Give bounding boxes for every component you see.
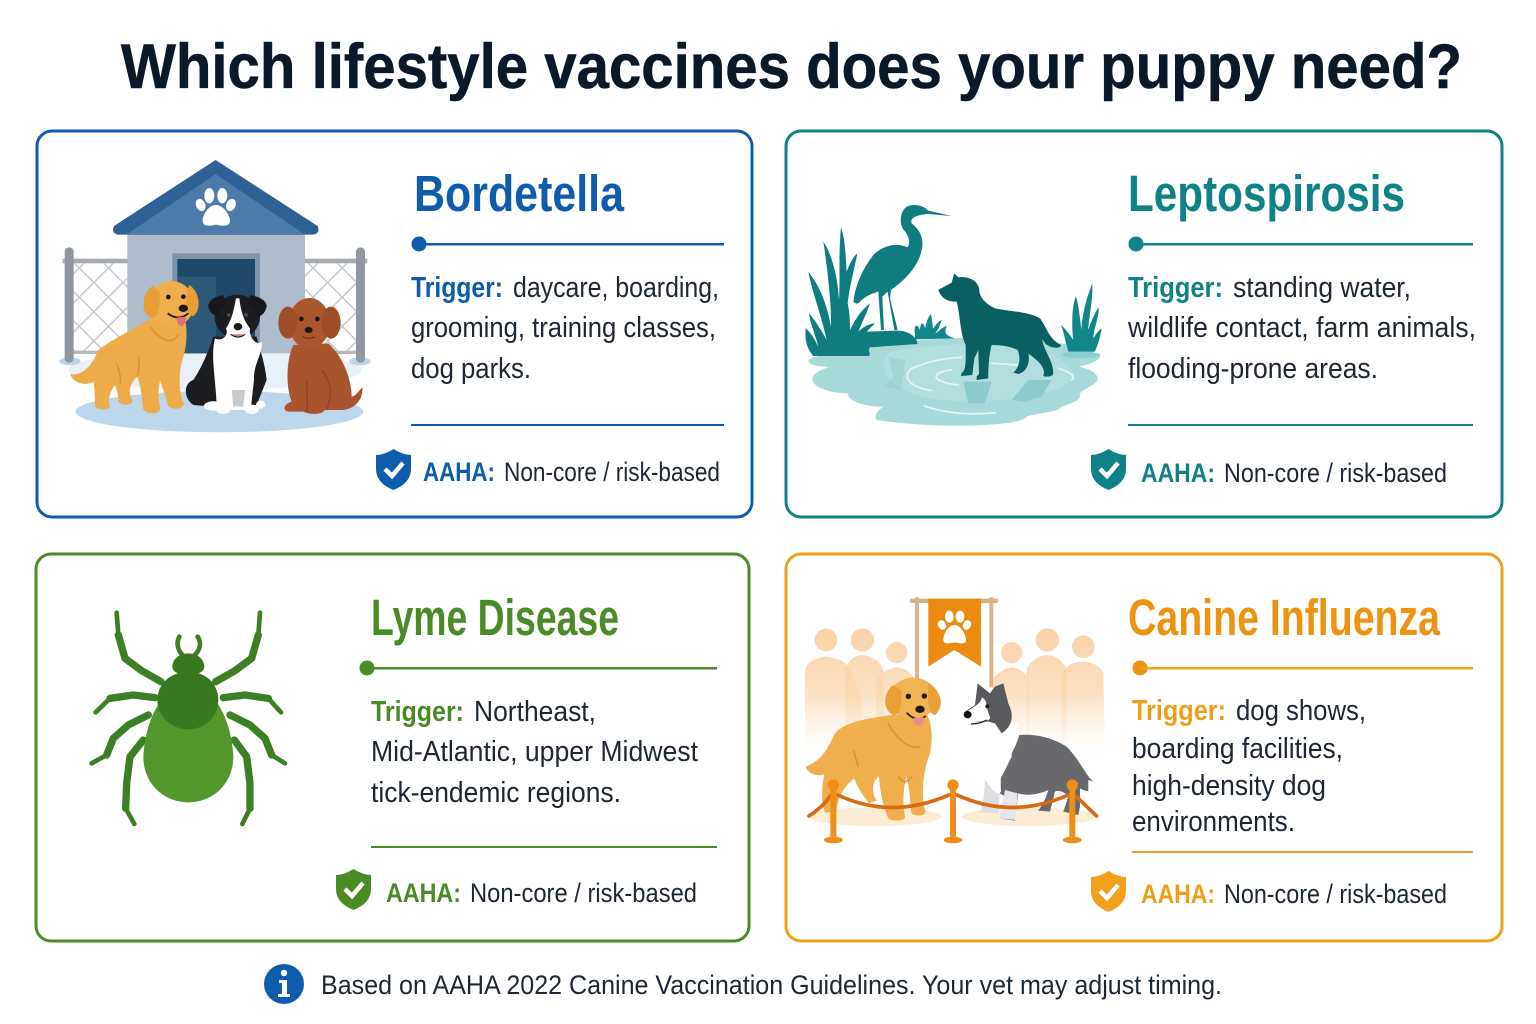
AAHA status: Non-core / risk-based — [504, 457, 720, 487]
icon: shield — [376, 449, 411, 490]
golden retriever — [806, 678, 941, 821]
panel: Lyme Disease — [36, 554, 749, 941]
trigger text: grooming, training classes, — [411, 312, 716, 344]
trigger text: dog parks. — [411, 353, 531, 385]
divider with dot — [412, 236, 724, 252]
icon: info — [264, 964, 304, 1004]
illustration: heron and dog in water — [805, 205, 1102, 426]
border collie — [186, 295, 267, 414]
trigger text: boarding facilities, — [1132, 733, 1343, 765]
rope stanchions — [809, 779, 1097, 843]
trigger text: Trigger: — [1132, 695, 1226, 727]
divider with dot — [360, 660, 717, 676]
trigger text: Mid-Atlantic, upper Midwest — [371, 736, 698, 768]
icon: shield — [1091, 449, 1126, 490]
icon: shield — [1091, 871, 1126, 912]
title: Which lifestyle vaccines does your puppy need? — [121, 32, 1462, 102]
AAHA status: AAHA: — [1141, 458, 1215, 488]
collie dog — [964, 683, 1099, 821]
trigger text — [1127, 272, 1476, 385]
icon: paw — [194, 188, 238, 226]
crowd — [805, 628, 1105, 750]
banner — [928, 599, 981, 667]
icon: paw — [936, 611, 973, 643]
AAHA status: Non-core / risk-based — [1224, 879, 1447, 909]
dog silhouette — [938, 273, 1061, 380]
AAHA status — [423, 457, 720, 487]
trigger text: Trigger: — [371, 696, 464, 728]
AAHA status — [1141, 458, 1447, 488]
trigger text: standing water, — [1233, 272, 1411, 304]
AAHA status: AAHA: — [386, 878, 461, 908]
trigger text: daycare, boarding, — [513, 272, 719, 304]
heading: Canine Influenza — [1128, 589, 1440, 646]
AAHA status — [386, 878, 697, 908]
trigger text — [411, 272, 719, 385]
trigger text: dog shows, — [1236, 695, 1366, 727]
panel: Leptospirosis — [786, 131, 1502, 517]
trigger text — [1132, 695, 1366, 838]
reeds right — [1061, 283, 1102, 352]
brown poodle — [278, 298, 362, 414]
panel: Bordetella — [37, 131, 752, 517]
AAHA status: AAHA: — [1141, 879, 1215, 909]
heading: Bordetella — [414, 165, 625, 222]
tick legs — [107, 635, 272, 808]
heron — [853, 205, 952, 330]
heading: Lyme Disease — [371, 589, 619, 646]
divider with dot — [1132, 660, 1473, 676]
trigger text: tick-endemic regions. — [371, 777, 621, 809]
trigger text: Northeast, — [474, 696, 596, 728]
trigger text: wildlife contact, farm animals, — [1127, 312, 1476, 344]
illustration: kennel with three dogs — [59, 160, 371, 432]
AAHA status — [1141, 879, 1447, 909]
AAHA status: Non-core / risk-based — [470, 878, 697, 908]
illustration: dog show — [805, 597, 1105, 843]
divider with dot — [1128, 236, 1473, 252]
footer note: Based on AAHA 2022 Canine Vaccination Guidelines. Your vet may adjust timing. — [321, 970, 1222, 1000]
AAHA status: Non-core / risk-based — [1224, 458, 1447, 488]
illustration: tick — [92, 613, 285, 824]
trigger text: high-density dog — [1132, 770, 1326, 802]
small grass — [915, 314, 955, 339]
panel: Canine Influenza — [786, 554, 1502, 941]
trigger text: flooding-prone areas. — [1128, 353, 1378, 385]
reeds left — [805, 227, 918, 356]
golden retriever — [70, 281, 199, 413]
trigger text: environments. — [1132, 806, 1295, 838]
icon: shield — [336, 869, 371, 910]
trigger text: Trigger: — [1128, 272, 1223, 304]
trigger text — [371, 696, 698, 809]
trigger text: Trigger: — [411, 272, 503, 304]
heading: Leptospirosis — [1128, 165, 1405, 222]
AAHA status: AAHA: — [423, 457, 495, 487]
